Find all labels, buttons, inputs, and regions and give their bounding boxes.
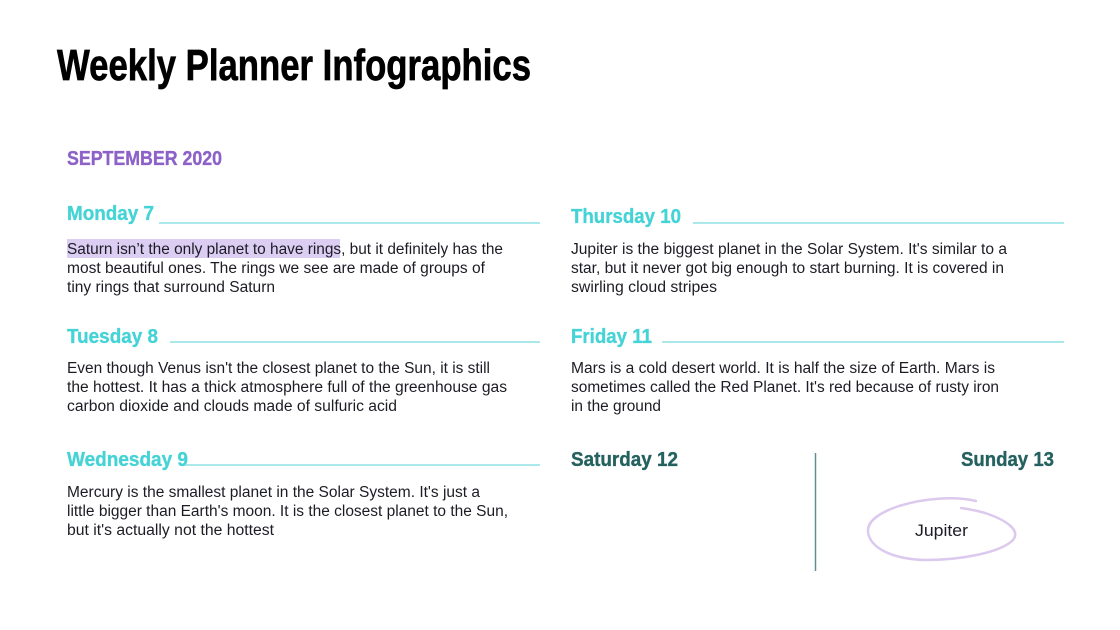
- heading: Monday 7: Monday 7: [67, 202, 154, 225]
- text: Wednesday: little bigger than Earth's moon. It is the closest planet to the Sun,: [67, 503, 508, 520]
- text: Tuesday: the hottest. It has a thick atmosphere full of the greenhouse gas: [67, 379, 507, 396]
- text: Tuesday: carbon dioxide and clouds made of sulfuric acid: [67, 398, 397, 415]
- panel: Tuesday 8: [67, 325, 507, 415]
- highlight behind first sentence: [67, 239, 340, 258]
- heading: Wednesday 9: Wednesday 9: [67, 448, 188, 471]
- panel: Wednesday 9: [67, 448, 508, 539]
- text: Monday: [67, 241, 503, 296]
- text: Monday: tiny rings that surround Saturn: [67, 279, 275, 296]
- panel: Monday 7: [67, 202, 503, 296]
- hand-drawn circle: [868, 498, 1015, 560]
- callout: circled Jupiter: [868, 498, 1015, 560]
- text: Thursday: star, but it never got big enough to start burning. It is covered in: [571, 260, 1004, 277]
- text: Friday: in the ground: [571, 398, 661, 415]
- text: Wednesday: but it's actually not the hottest: [67, 522, 275, 539]
- panel: Friday 11: [571, 325, 999, 415]
- text: Monday: most beautiful ones. The rings we see are made of groups of: [67, 260, 486, 277]
- text: Wednesday: [67, 484, 508, 539]
- text: Friday: sometimes called the Red Planet. It's red because of rusty iron: [571, 379, 999, 396]
- text: Thursday: Jupiter is the biggest planet in the Solar System. It's similar to a: [571, 241, 1007, 258]
- heading: Saturday 12: Saturday 12: [571, 448, 678, 471]
- month heading: SEPTEMBER 2020: [67, 147, 222, 170]
- text: Tuesday: [67, 360, 507, 415]
- heading: Sunday 13: Sunday 13: [961, 448, 1054, 471]
- text: Tuesday: Even though Venus isn't the closest planet to the Sun, it is still: [67, 360, 490, 377]
- text: Monday: Saturn isn’t the only planet to have rings, but it definitely has the: [67, 241, 503, 258]
- label: Jupiter: Jupiter: [915, 521, 968, 540]
- text: Thursday: [571, 241, 1007, 296]
- text: Wednesday: Mercury is the smallest planet in the Solar System. It's just a: [67, 484, 480, 501]
- text: Friday: Mars is a cold desert world. It is half the size of Earth. Mars is: [571, 360, 995, 377]
- heading: Tuesday 8: Tuesday 8: [67, 325, 158, 348]
- panel: Thursday 10: [571, 205, 1007, 296]
- heading: Thursday 10: Thursday 10: [571, 205, 681, 228]
- text: Thursday: swirling cloud stripes: [571, 279, 717, 296]
- heading: Friday 11: Friday 11: [571, 325, 652, 348]
- text: Friday: [571, 360, 999, 415]
- title: Weekly Planner Infographics: [57, 41, 531, 90]
